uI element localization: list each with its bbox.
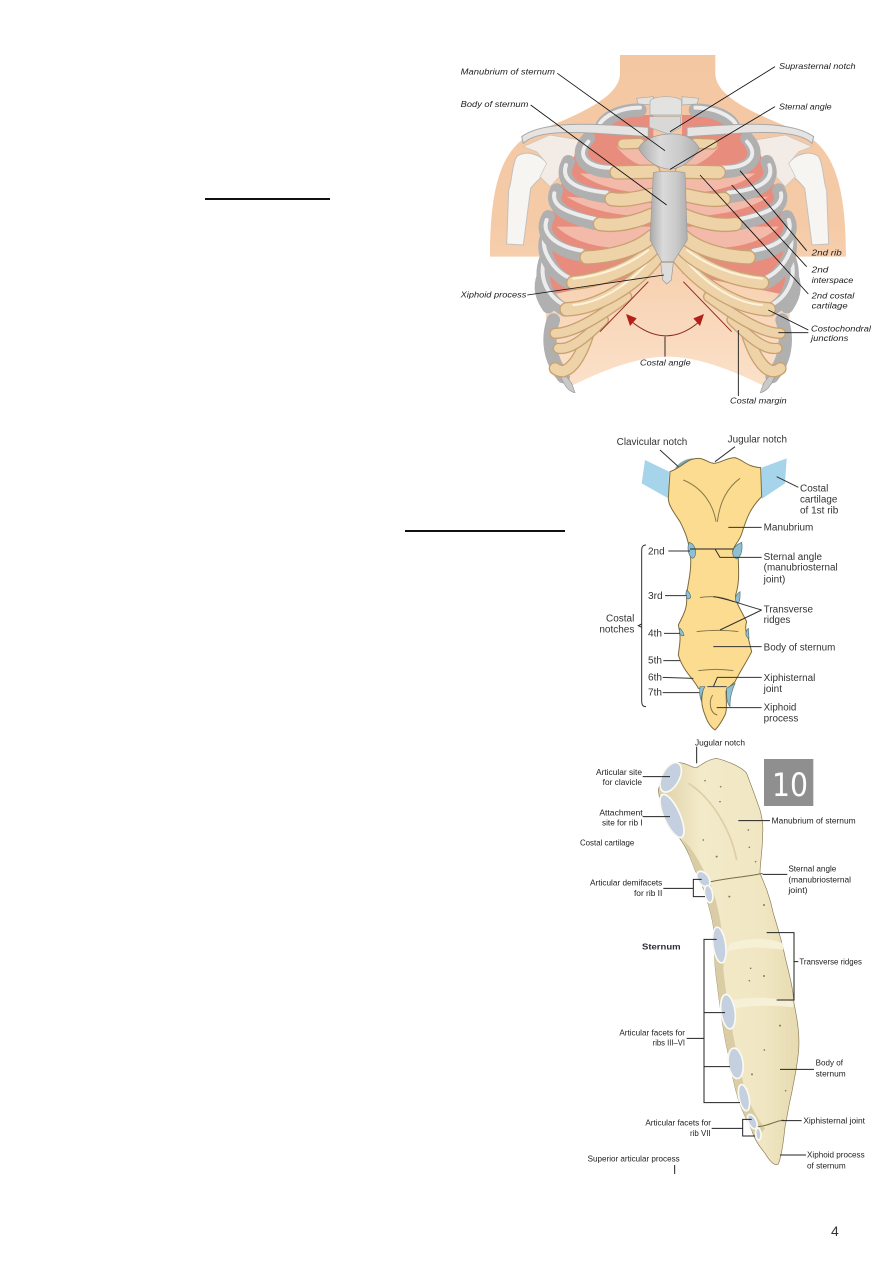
joint lines: [688, 783, 783, 1127]
label: Xiphoid process: Xiphoid: [764, 702, 796, 713]
label: Costal cartilage of 1st rib: Costal: [800, 484, 828, 495]
label: Manubrium of sternum: [461, 66, 665, 151]
label: Transverse ridges: [767, 933, 862, 1000]
label: Body of sternum: Body of sternum: [461, 99, 528, 109]
label: Xiphoid process of sternum: of sternum: [807, 1160, 846, 1170]
label: 2nd rib: 2nd rib: [811, 248, 842, 258]
ribs: patient's right half: [507, 97, 656, 393]
label: Jugular notch: Jugular notch: [728, 435, 787, 446]
figure: thoracic cage anterior view: [460, 55, 872, 406]
label: Body of sternum: sternum: [816, 1069, 846, 1079]
label: Transverse ridges: [713, 597, 813, 630]
label: 2nd costal cartilage: cartilage: [812, 300, 848, 310]
label: 2nd: [648, 546, 690, 557]
label: Costal notches: notches: [599, 624, 634, 635]
label: Transverse ridges: ridges: [764, 615, 790, 626]
label: Costal cartilage of 1st rib: of 1st rib: [800, 506, 839, 517]
label: Manubrium: Manubrium: [764, 523, 813, 534]
sternum ridge lines: [683, 478, 740, 715]
label: Transverse ridges: Transverse: [764, 604, 813, 615]
section number box: 10: [772, 766, 808, 804]
label: 2nd interspace: interspace: [812, 275, 854, 285]
articular facets: [655, 759, 762, 1140]
costal cartilage of first rib (blue): [642, 458, 787, 499]
label: 2nd costal cartilage: 2nd costal: [811, 291, 855, 301]
label: Costal cartilage of 1st rib: cartilage: [800, 495, 838, 506]
figure: sternum lateral view: [580, 737, 866, 1174]
shaded medial edge: [683, 840, 765, 1140]
label: Sternal angle (manubriosternal joint): [763, 864, 851, 895]
label: Articular facets for ribs III–VI: Articular facets for: [619, 1027, 685, 1037]
label: Manubrium of sternum: Manubrium of sternum: [461, 66, 555, 76]
label: Sternal angle (manubriosternal joint): Sternal angle: [764, 552, 822, 563]
label: Costal cartilage of 1st rib: [777, 477, 839, 517]
label: Attachment site for rib I: Attachment: [599, 807, 643, 817]
label: Xiphoid process: Xiphoid process: [460, 289, 527, 299]
label: Xiphoid process of sternum: [780, 1150, 865, 1170]
label: 2nd interspace: 2nd: [811, 265, 830, 275]
label: Sternal angle (manubriosternal joint): Sternal angle: [788, 864, 837, 874]
label: Sternal angle (manubriosternal joint): [715, 549, 838, 585]
label: 2nd rib: [740, 171, 842, 258]
label: Articular site for clavicle: [596, 767, 670, 787]
label: Jugular notch: [715, 435, 787, 462]
skin: neck, shoulders and torso: [490, 55, 846, 387]
label: Sternal angle: Sternal angle: [779, 101, 832, 111]
label: Articular facets for ribs III–VI: ribs III–VI: [653, 1038, 685, 1048]
label: Body of sternum: [780, 1058, 846, 1079]
costal angle arrows: [600, 282, 732, 336]
label: Sternum: Sternum: [642, 941, 681, 951]
vertebra and sternum: [638, 97, 699, 284]
label: Sternal angle (manubriosternal joint): joint): [787, 885, 808, 895]
label: Xiphisternal joint: Xiphisternal joint: [803, 1116, 866, 1126]
label: Transverse ridges: Transverse ridges: [799, 957, 862, 967]
label: Body of sternum: Body of: [816, 1058, 844, 1068]
section number box: [764, 759, 813, 806]
label: 2nd interspace: [732, 185, 854, 285]
label: Body of sternum: Body of sternum: [764, 643, 835, 654]
label: Articular facets for ribs III–VI: [619, 939, 740, 1103]
label: Articular facets for rib VII: rib VII: [690, 1128, 711, 1138]
label: Manubrium: [728, 523, 813, 534]
label: Clavicular notch: [617, 437, 687, 467]
label: Costochondral junctions: Costochondral: [811, 324, 872, 334]
label: 2nd: 2nd: [648, 546, 665, 557]
label: Xiphoid process: [460, 275, 664, 299]
label: 3rd: 3rd: [648, 591, 663, 602]
label: Attachment site for rib I: site for rib I: [602, 817, 643, 827]
label: Costal angle: [640, 337, 691, 368]
label: Body of sternum: [713, 643, 835, 654]
label: 4th: 4th: [648, 628, 662, 639]
label: Articular facets for rib VII: [645, 1118, 755, 1138]
label: Jugular notch: Jugular notch: [695, 737, 745, 747]
label: 2nd costal cartilage: [700, 175, 855, 310]
label: Articular demifacets for rib II: [590, 878, 705, 898]
label: 3rd: [648, 591, 687, 602]
label: Costochondral junctions: [768, 310, 872, 343]
label: Articular demifacets for rib II: Articular demifacets: [590, 878, 662, 888]
label: 6th: 6th: [648, 673, 662, 684]
label: Sternal angle: [670, 101, 832, 169]
label: Body of sternum: [461, 99, 667, 205]
label: 7th: [648, 688, 699, 699]
label: Articular demifacets for rib II: for rib II: [634, 888, 662, 898]
label: Articular site for clavicle: for clavicle: [603, 777, 642, 787]
label: Costal margin: [730, 330, 787, 406]
label: 6th: [648, 673, 693, 684]
label: Xiphoid process: process: [764, 713, 798, 724]
label: Superior articular process: Superior articular process: [588, 1154, 680, 1164]
label: Articular facets for rib VII: Articular facets for: [645, 1118, 711, 1128]
bracket: costal notches: [638, 545, 646, 707]
ridge shading: [727, 939, 793, 1008]
label: 4th: [648, 628, 680, 639]
sternum body outline: [668, 458, 762, 730]
label: Superior articular process: [588, 1154, 680, 1174]
label: Costal cartilage: Costal cartilage: [580, 838, 635, 848]
ribs: patient's left half: [679, 97, 829, 393]
label: Costal notches: Costal: [606, 614, 634, 625]
label: Xiphisternal joint: joint: [763, 684, 782, 695]
bone surface pits: [702, 780, 786, 1091]
sternum bone: [658, 758, 799, 1165]
label: Xiphoid process: [717, 702, 798, 724]
label: Costal angle: Costal angle: [640, 358, 691, 368]
costal notches (blue facets): [679, 542, 749, 707]
label: Costal notches: [599, 614, 634, 635]
label: Costochondral junctions: junctions: [810, 333, 849, 343]
label: Articular site for clavicle: Articular site: [596, 767, 642, 777]
label: 5th: [648, 656, 680, 667]
label: Costal margin: Costal margin: [730, 396, 787, 406]
label: Attachment site for rib I: [599, 807, 670, 827]
label: Sternal angle (manubriosternal joint): joint): [763, 574, 785, 585]
label: Xiphoid process of sternum: Xiphoid process: [807, 1150, 865, 1160]
label: Suprasternal notch: [670, 61, 856, 132]
label: Sternal angle (manubriosternal joint): (manubriosternal: [764, 563, 838, 574]
label: Manubrium of sternum: Manubrium of sternum: [772, 816, 856, 826]
label: Sternal angle (manubriosternal joint): (manubriosternal: [788, 874, 851, 884]
label: Jugular notch: [695, 737, 745, 763]
label: Xiphisternal joint: Xiphisternal: [764, 673, 815, 684]
label: 5th: 5th: [648, 656, 662, 667]
label: Clavicular notch: Clavicular notch: [617, 437, 687, 448]
label: Xiphisternal joint: [713, 673, 815, 695]
underline: left heading rule: [205, 198, 330, 200]
figure: sternum anterior view: [599, 435, 839, 730]
label: 7th: 7th: [648, 688, 662, 699]
label: Suprasternal notch: Suprasternal notch: [779, 61, 856, 71]
underline: middle heading rule: [405, 530, 565, 532]
page number: 4: [831, 1223, 839, 1239]
